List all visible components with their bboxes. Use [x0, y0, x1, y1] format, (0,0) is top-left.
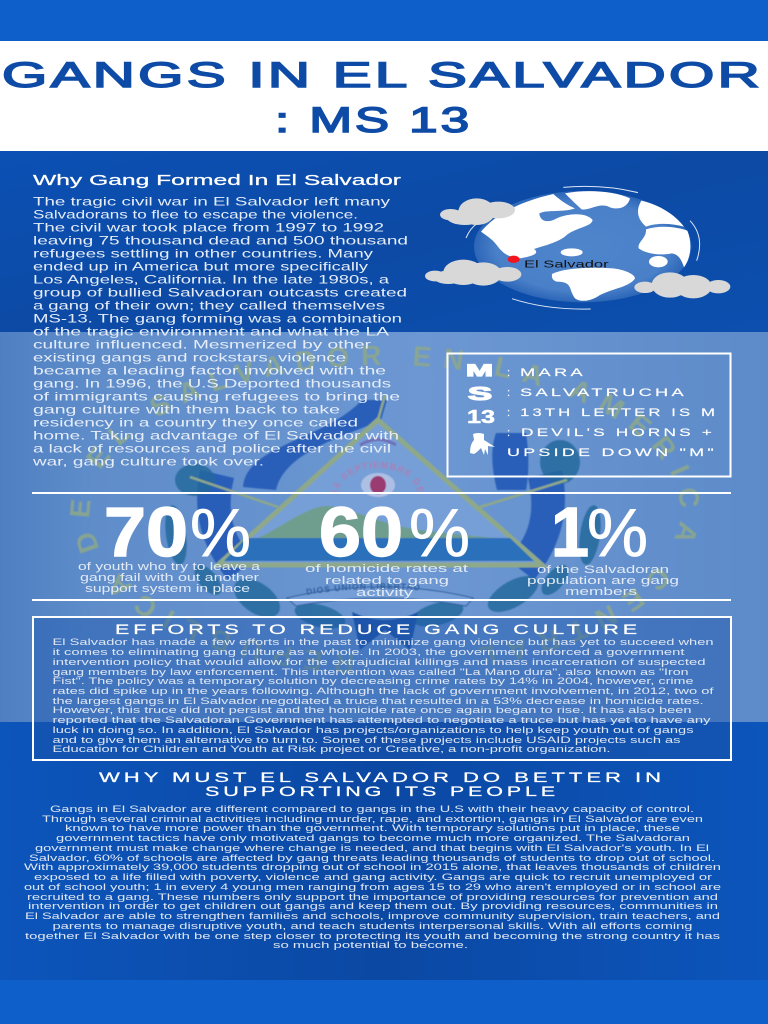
text block: why must El Salvador do better: El Salvador are able to strengthen families and schools, improve community supervision, train teachers, and [25, 910, 720, 921]
text block: why gang formed: Salvadorans to flee to escape the violence. [33, 209, 358, 222]
text block: efforts: rates did spike up in the years following. Although the lack of government involvement, in 2012, two of [52, 685, 714, 696]
text block: why gang formed: became a leading factor involved with the [33, 365, 386, 378]
wreath [162, 440, 604, 633]
text block: efforts: reported that the Salvadoran Government has attempted to negotiate a truce but has yet to have any [52, 714, 711, 725]
text block: why gang formed: Los Angeles, California. In the late 1980s, a [33, 274, 390, 287]
stat: 1%: % [587, 495, 648, 571]
legend text: SALVATRUCHA [520, 387, 687, 399]
text block: why must El Salvador do better: exposed to a life filled with poverty, violence and gang activity. Gangs are quick to recruit unemployed or [34, 871, 712, 882]
red cap [361, 473, 395, 497]
stat: 60% [305, 493, 470, 599]
text block: why gang formed: of the tragic environment and what the LA [33, 326, 389, 339]
text block: why gang formed: existing gangs and rockstars, violence [33, 352, 346, 365]
title [2, 56, 763, 140]
legend text [507, 367, 718, 459]
text block: why gang formed: MS-13. The gang forming was a combination [33, 313, 402, 326]
text block: why gang formed: of immigrants causing refugees to bring the [33, 391, 400, 404]
clouds [425, 198, 730, 298]
heading: why must El Salvador do better: SUPPORTING ITS PEOPLE [205, 783, 559, 799]
text block: why gang formed: gang culture with them back to take [33, 404, 340, 417]
text block: efforts: intervention policy that would allow for the extrajudicial killings and mass incarceration of suspected [52, 656, 706, 667]
text block: why must El Salvador do better: so much potential to become. [273, 939, 468, 950]
volcano [258, 506, 495, 538]
text block: why must El Salvador do better: parents to manage disruptive youth, and teach students interpersonal skills. With all efforts coming [52, 920, 692, 931]
text block: why gang formed: gang. In 1996, the U.S Deported thousands [33, 378, 391, 391]
text block: efforts: gang members by law enforcement. This intervention was called "La Mano dura", also known as "Iron [52, 666, 688, 677]
globe map illustration [425, 186, 730, 309]
text block: why gang formed: The tragic civil war in El Salvador left many [33, 196, 390, 209]
text block: why gang formed: culture influenced. Mesmerized by other [33, 339, 371, 352]
globe ocean [474, 191, 691, 302]
stat: 1%: members [565, 586, 638, 598]
scroll [287, 587, 473, 606]
legend text: UPSIDE DOWN "M" [507, 447, 717, 459]
text block: why must El Salvador do better: Salvador, 60% of schools are affected by gang threats leading thousands of students to drop out of school. [29, 852, 715, 863]
title: : MS 13 [275, 101, 472, 140]
coat of arms watermark: DIOS UNION LIBERTAD [306, 582, 420, 595]
text block: why must El Salvador do better: recruited to a gang. These numbers only support the importance of providing resources for prevention and [27, 891, 718, 902]
icon: letter M: M [466, 361, 493, 380]
text block: why must El Salvador do better: intervention in order to get children out gangs and keep them out. By providing resources, communities in [28, 900, 718, 911]
legend text: : [507, 367, 512, 379]
panel: MS-13 meaning [448, 354, 730, 476]
continents [481, 191, 690, 301]
text block: why must El Salvador do better: government must make change where change is needed, and that begins with El Salvador's youth. In El [35, 842, 709, 853]
coat of arms watermark [70, 345, 700, 674]
text block: why must El Salvador do better: Gangs in El Salvador are different compared to gangs in the U.S with their heavy capacity of control. [50, 803, 694, 814]
stat: 60%: 60 [319, 493, 403, 571]
rainbow [360, 440, 396, 445]
text block: why gang formed: a lack of resources and police after the civil [33, 443, 391, 456]
september text: 15 SEPTIEMBRE DE 1821 [332, 462, 424, 495]
text block: why must El Salvador do better [24, 803, 721, 950]
text block: efforts [52, 636, 714, 754]
text block: efforts: Education for Children and Youth at Risk project or Creative, a non-profit organization. [52, 743, 610, 754]
triangle [218, 420, 542, 565]
flags [197, 400, 565, 580]
divider bottom [32, 599, 731, 601]
legend text: : [507, 427, 512, 439]
text block: why must El Salvador do better: government tactics have only motivated gangs to become much more organized. The Salvadoran [56, 832, 690, 843]
text block: why gang formed: ended up in America but more specifically [33, 261, 368, 274]
El Salvador marker [508, 256, 520, 263]
legend text: DEVIL'S HORNS + [521, 427, 715, 439]
text block: efforts: However, this truce did not persist and the homicide rate once again began to rise. It has also been [52, 704, 692, 715]
text block: why must El Salvador do better: Through several criminal activities including murder, rape, and extortion, gangs in El Salvador are even [42, 813, 703, 824]
stat: 1%: of the Salvadoran [537, 564, 669, 576]
text block: why gang formed: The civil war took place from 1997 to 1992 [33, 222, 384, 235]
text block: why must El Salvador do better: out of school youth; 1 in every 4 young men ranging from ages 15 to 29 who aren't employed or in school are [24, 881, 721, 892]
text block: why gang formed: refugees settling in other countries. Many [33, 248, 373, 261]
stat: 70%: gang fail with out another [80, 572, 259, 584]
text block: why gang formed: leaving 75 thousand dead and 500 thousand [33, 235, 408, 248]
text block: why gang formed: a gang of their own; they called themselves [33, 300, 385, 313]
text block: why gang formed: war, gang culture took over. [31, 456, 264, 469]
icon: letter S: S [468, 384, 492, 404]
stat: 60%: of homicide rates at [305, 563, 468, 575]
heading: why must El Salvador do better: WHY MUST EL SALVADOR DO BETTER IN [99, 769, 665, 785]
stat: 60%: related to gang [325, 575, 449, 587]
stat: 1%: population are gang [527, 575, 679, 587]
text block: why gang formed [31, 196, 408, 469]
text block: why gang formed: residency in a country they once called [33, 417, 358, 430]
text block: efforts: the largest gangs in El Salvador negotiated a truce that resulted in a 53% decrease in homicide rates. [52, 695, 704, 706]
stat: 70%: of youth who try to leave a [78, 561, 261, 573]
bow [352, 612, 418, 650]
ocean [224, 538, 534, 561]
heading: efforts: EFFORTS TO REDUCE GANG CULTURE [115, 622, 641, 637]
stat: 60%: activity [356, 587, 414, 599]
text block: efforts: El Salvador has made a few efforts in the past to minimize gang violence but has yet to succeed when [52, 636, 714, 647]
El Salvador label: El Salvador [524, 260, 610, 271]
legend text: : [507, 407, 512, 419]
stat: 1%: 1 [551, 493, 589, 571]
heading: why must El Salvador do better [99, 769, 665, 799]
stat: 1% [527, 493, 679, 598]
text block: why must El Salvador do better: together El Salvador with be one step closer to protecting its youth and becoming the strong country it has [25, 930, 720, 941]
orbit strokes [466, 186, 700, 309]
divider top [32, 492, 731, 494]
text block: efforts: luck in doing so. In addition, El Salvador has projects/organizations to help keep youth out of gangs [52, 724, 694, 735]
stat: 70%: % [190, 495, 251, 571]
stat: 70% [78, 493, 261, 595]
stat: 60%: % [409, 495, 470, 571]
title: GANGS IN EL SALVADOR [2, 56, 763, 95]
panel: efforts to reduce gang culture [33, 617, 731, 760]
text block: efforts: and to give them an alternative to turn to. Some of these projects include USAID projects such as [52, 734, 681, 745]
heading: why gang formed: Why Gang Formed In El Salvador [33, 173, 401, 189]
legend text: 13TH LETTER IS M [520, 407, 718, 419]
crossed poles [190, 395, 567, 507]
text block: why gang formed: home. Taking advantage of El Salvador with [33, 430, 399, 443]
text block: efforts: it comes to eliminating gang culture as a whole. In 2003, the government enforced a government [52, 646, 685, 657]
stat: 70%: support system in place [85, 583, 250, 595]
text block: why must El Salvador do better: With approximately 39,000 students dropping out of school in 2015 alone, that leaves thousands of children [24, 861, 721, 872]
circular lettering: REPUBLICA DE EL SALVADOR EN LA AMERICA CENTRAL [70, 345, 700, 674]
icon: number 13: 13 [467, 407, 495, 427]
text block: why must El Salvador do better: known to have more power than the government. With temporary solutions put in place, these [65, 822, 680, 833]
icon: hand sign [470, 433, 495, 455]
legend text: : [507, 387, 512, 399]
legend text: MARA [520, 367, 586, 379]
stat: 70%: 70 [104, 493, 188, 571]
text block: efforts: Fist". The policy was a temporary solution by decreasing crime rates by 14% in 2004, however, crime [52, 675, 694, 686]
text block: why gang formed: group of bullied Salvadoran outcasts created [33, 287, 407, 300]
